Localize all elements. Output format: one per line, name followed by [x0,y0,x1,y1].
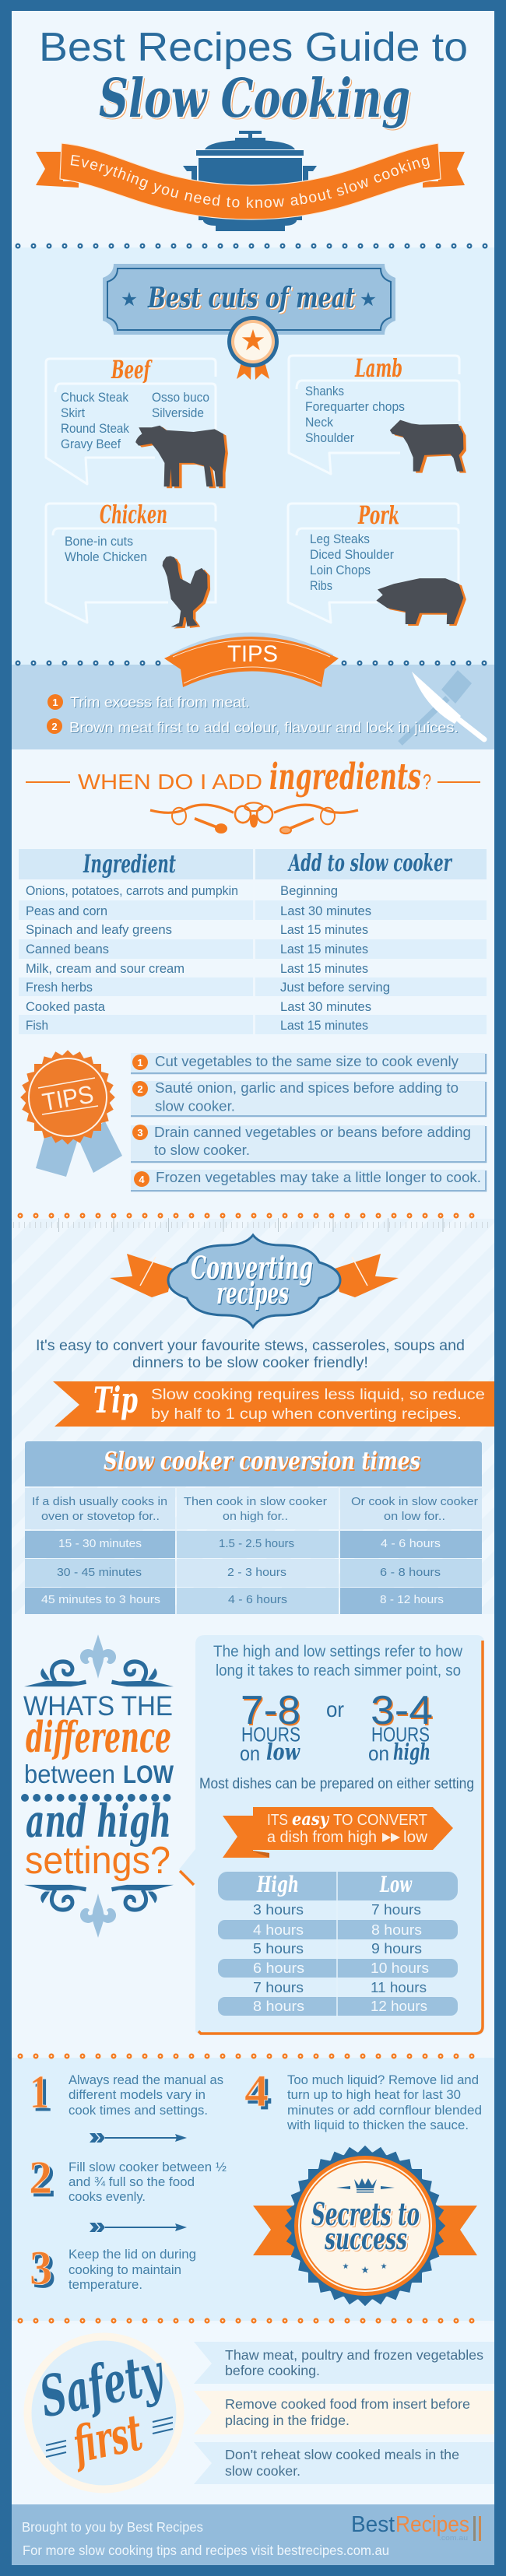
heading: chicken: Chicken [100,500,167,529]
stat: 7-8 hours on low: 7-8 [241,1688,300,1733]
ribbon text: Everything you need to know about slow cooking [70,154,430,208]
table rows: Beginning [280,884,338,898]
icon: pig [376,578,463,624]
hours rows [253,1902,429,2014]
conversion rows: 30 - 45 minutes [57,1567,142,1579]
table rows: Fish [26,1019,48,1033]
conversion rows [41,1538,444,1606]
hours rows: 11 hours [371,1980,427,1995]
intro text [36,1338,465,1371]
conversion rows: 1.5 - 2.5 hours [219,1538,294,1550]
panel: high and low settings [179,1635,484,2035]
banner: easy to convert: easy [292,1809,330,1830]
conversion rows: 15 - 30 minutes [58,1538,142,1550]
beef cuts list: Silverside [152,406,204,420]
intro text: It's easy to convert your favourite stews, casseroles, soups and [36,1338,465,1354]
lamb cuts list: Shoulder [305,431,354,445]
table header: Ingredient [83,849,176,879]
icon: slow cooker pot [183,131,317,231]
table rows: Canned beans [26,942,109,956]
safety band 1: before cooking. [225,2363,320,2378]
heading: lamb: Lamb [354,353,402,383]
lamb cuts list: Shanks [305,384,344,398]
logo: best recipes [351,2512,481,2542]
tip box 4 [131,1169,486,1191]
banner: tip: by half to 1 cup when converting recipes. [151,1406,462,1423]
hours rows: 8 hours [253,1999,304,2014]
secret 2: Fill slow cooker between ½ [69,2160,227,2174]
table rows: Onions, potatoes, carrots and pumpkin [26,884,238,898]
column headers: on high for.. [223,1511,288,1523]
stat: 7-8 hours on low: HOURS [241,1723,300,1746]
table rows: Peas and corn [26,904,107,918]
banner: tip: Tip [93,1379,138,1421]
icon: cow [135,426,225,486]
table header [83,849,452,879]
heading: when do i add ingredients: ? [423,770,431,794]
beef cuts list: Osso buco [152,391,209,405]
banner: tip: Slow cooking requires less liquid, so reduce [151,1387,485,1403]
secret 4: 4 [244,2065,269,2116]
footer [12,2504,494,2565]
hours rows: 4 hours [253,1922,304,1938]
table rows: Last 15 minutes [280,923,368,937]
heading: when do i add ingredients: ingredients [269,756,421,798]
heading text block: difference [26,1712,171,1762]
seal label: success [324,2221,407,2256]
seal label: Secrets to [311,2196,420,2233]
table rows: Last 30 minutes [280,1000,371,1014]
safety band 2: placing in the fridge. [225,2413,350,2428]
tip box 2: 2 [137,1083,143,1095]
icon: flourish with spoon and fork [150,802,358,834]
conversion rows: 8 - 12 hours [380,1594,444,1606]
table rows: Last 15 minutes [280,942,368,956]
secret 3: 3 [30,2242,52,2295]
ornament: bottom fleur and scrolls [24,1885,174,1938]
title line two: Slow Cooking: Slow Cooking [99,68,410,130]
safety band 1: Thaw meat, poultry and frozen vegetables [225,2347,483,2363]
safety band 3: Don't reheat slow cooked meals in the [225,2447,459,2462]
banner: easy to convert: low [403,1829,428,1846]
badge: converting recipes: Converting [191,1250,313,1286]
secret 3: Keep the lid on during [69,2248,196,2262]
footer credit: Brought to you by Best Recipes [22,2519,203,2535]
heading: what's the difference between low and high settings [23,1634,174,1938]
secret 4: with liquid to thicken the sauce. [286,2118,469,2132]
heading: pork: Pork [357,500,399,530]
secret 1: Always read the manual as [69,2073,223,2087]
badge: converting recipes [110,1235,399,1327]
secret 2: cooks evenly. [69,2190,146,2204]
beef cuts list: Chuck Steak [61,391,129,405]
table rows: Spinach and leafy greens [26,923,172,937]
pork cuts list [310,532,394,593]
secret 2: 2 [29,2152,52,2203]
secret 3: cooking to maintain [69,2263,181,2277]
column headers [32,1496,478,1523]
table rows: Milk, cream and sour cream [26,962,184,976]
seal label: TIPS [40,1080,96,1116]
stat: 3-4 hours on high: on [368,1742,389,1765]
tip 1: Trim excess fat from meat. [70,694,250,710]
column headers: on low for.. [384,1511,445,1523]
stat: 7-8 hours on low [240,1688,300,1765]
heading text block: LOW [123,1760,174,1788]
tip 2: 2 [51,721,58,732]
panel: best cuts of meat [46,264,463,627]
secret 2: and ¾ full so the food [69,2175,195,2189]
secret 3 [30,2242,196,2295]
heading text block: settings? [25,1840,170,1882]
footer credit: For more slow cooking tips and recipes visit bestrecipes.com.au [23,2543,389,2558]
secret 4 [244,2065,482,2132]
icon: sheep [390,420,463,472]
panel: safety first [23,2333,494,2494]
tip box 2: Sauté onion, garlic and spices before adding to [155,1079,459,1096]
tip box 4: Frozen vegetables may take a little longer to cook. [156,1169,481,1185]
speech bubble: pork [288,500,463,624]
badge: secrets to success seal [253,2146,477,2306]
pork cuts list: Ribs [310,579,332,593]
table rows: Fresh herbs [26,981,93,995]
hours rows: 10 hours [371,1960,429,1976]
heading text block: and high [26,1795,171,1848]
conversion rows: 2 - 3 hours [227,1567,286,1579]
lamb cuts list: Forequarter chops [305,400,405,414]
table rows: Cooked pasta [26,1000,106,1014]
badge: best cuts heading: Best cuts of meat [147,282,355,314]
table rows: Just before serving [280,981,390,995]
pork cuts list: Loin Chops [310,563,371,577]
chicken cuts list [65,535,147,564]
ornament: top fleur and scrolls [24,1634,174,1686]
settings intro text: long it takes to reach simmer point, so [216,1662,461,1679]
heading text block: WHATS THE [23,1691,173,1721]
stat: 3-4 hours on high: 3-4 [371,1688,433,1733]
table: when to add ingredients [19,849,487,1034]
column headers: If a dish usually cooks in [32,1496,167,1508]
column headers: Low [379,1872,413,1897]
secret 4: Too much liquid? Remove lid and [287,2073,479,2087]
safety band 3: slow cooker. [225,2463,300,2479]
secret 2 [29,2152,227,2204]
chicken cuts list: Bone-in cuts [65,535,133,549]
tip box 2 [131,1079,486,1116]
hours rows: 3 hours [253,1902,304,1918]
panel: converting recipes [25,1235,494,1614]
tip box 1 [131,1053,486,1073]
pork cuts list: Diced Shoulder [310,548,394,562]
beef cuts list: Round Steak [61,422,130,436]
table rows: Last 15 minutes [280,1019,368,1033]
safety band 2: Remove cooked food from insert before [225,2396,470,2412]
heading: beef: Beef [111,355,153,384]
column headers: High [256,1872,299,1897]
beef cuts list: Skirt [61,406,85,420]
conversion rows: 45 minutes to 3 hours [41,1594,160,1606]
title [39,25,468,130]
icon: arrow [90,2223,187,2232]
hours rows: 7 hours [253,1980,304,1995]
banner: subtitle ribbon [36,142,465,220]
hours rows: 7 hours [371,1902,421,1918]
hours rows: 12 hours [371,1999,427,2014]
secret 1: 1 [30,2066,49,2118]
stat: 7-8 hours on low: on [240,1742,260,1765]
icon: crown [336,2178,395,2193]
lamb cuts list [305,384,405,445]
speech bubble: lamb [289,353,463,474]
conversion rows: 4 - 6 hours [381,1538,441,1550]
speech bubble: beef [46,355,225,486]
tip box 4: 4 [139,1174,145,1185]
beef cuts list [61,391,209,451]
logo: best recipes: Recipes [395,2512,469,2537]
banner: easy to convert: TO CONVERT [333,1812,427,1829]
hours rows: 8 hours [371,1922,422,1938]
safety band 3 [194,2442,494,2484]
speech bubble: chicken [46,500,216,627]
banner: easy to convert: a dish from high [267,1829,377,1846]
heading text block: between [24,1760,115,1788]
settings intro text [213,1642,462,1679]
panel: vegetable tips list [131,1053,486,1191]
footer credit [22,2519,389,2558]
tip box 3: to slow cooker. [154,1142,250,1158]
heading: when do i add ingredients: WHEN DO I ADD [78,770,262,794]
heading text block [23,1691,174,1882]
secret 1: different models vary in [69,2088,206,2102]
note: most dishes: Most dishes can be prepared on either setting [199,1776,474,1792]
tip box 3: Drain canned vegetables or beans before adding [154,1124,471,1140]
tip box 1: 1 [137,1057,143,1069]
table: conversion times [25,1441,482,1614]
banner: easy to convert [223,1807,453,1858]
column headers: oven or stovetop for.. [41,1511,160,1523]
secret 4: turn up to high heat for last 30 [287,2088,461,2102]
logo: best recipes: Best [351,2512,395,2537]
hours rows: 6 hours [253,1960,304,1976]
safety band 2 [194,2391,494,2434]
intro text: dinners to be slow cooker friendly! [132,1355,368,1371]
icon: crossed cleaver and knife [400,670,484,743]
table rows: Last 15 minutes [280,962,368,976]
icon: arrow [90,2133,187,2143]
icon: rooster [163,556,208,627]
badge: safety first circle: first [66,2403,147,2475]
tip box 1: Cut vegetables to the same size to cook evenly [155,1053,459,1069]
table: high to low conversion [218,1872,458,2017]
badge: tips seal [20,1050,122,1177]
safety band 1 [194,2342,494,2384]
badge: best cuts heading [103,264,395,335]
tip 2: Brown meat first to add colour, flavour and lock in juices. [69,719,459,735]
text: or: or [326,1697,344,1721]
panel: meat tips [47,632,484,743]
conversion rows: 4 - 6 hours [228,1594,287,1606]
banner: easy to convert: ITS [267,1812,288,1829]
banner: tip [53,1379,494,1427]
chicken cuts list: Whole Chicken [65,550,147,564]
stat: 3-4 hours on high: high [393,1739,430,1765]
column headers [256,1872,413,1897]
tip box 2: slow cooker. [155,1097,235,1114]
stat: 7-8 hours on low: low [266,1739,300,1765]
banner: tips arch [164,632,339,687]
panel: secrets to success [29,2065,482,2306]
secret 1 [30,2066,223,2118]
seal label [311,2196,420,2256]
secret 4: minutes or add cornflour blended [287,2104,482,2118]
table rows: Last 30 minutes [280,904,371,918]
pork cuts list: Leg Steaks [310,532,370,546]
hours rows: 9 hours [371,1941,422,1957]
stat: 3-4 hours on high: HOURS [371,1723,430,1746]
icon: rosette with star [227,316,279,380]
badge: safety first circle [23,2333,184,2494]
heading: when do i add ingredients [26,756,480,798]
tip box 3: 3 [137,1127,143,1139]
hours rows: 5 hours [253,1941,304,1957]
badge: safety first circle: Safety [34,2339,170,2430]
title line one: Best Recipes Guide to [39,25,468,70]
lamb cuts list: Neck [305,416,334,430]
logo: best recipes: .com.au [439,2534,468,2542]
banner label: TIPS [227,641,278,667]
tip box 3 [131,1124,486,1162]
table rows [26,884,390,1033]
stat: 3-4 hours on high [368,1688,433,1765]
secret 1: cook times and settings. [69,2104,208,2118]
column headers: Or cook in slow cooker [351,1496,478,1508]
badge: converting recipes: recipes [216,1276,289,1311]
conversion rows: 6 - 8 hours [380,1567,441,1579]
secret 3: temperature. [69,2278,142,2292]
settings intro text: The high and low settings refer to how [213,1642,462,1661]
beef cuts list: Gravy Beef [61,437,121,451]
icon: three stars [343,2263,387,2273]
tip 1: 1 [52,697,58,708]
column headers: Then cook in slow cooker [184,1496,327,1508]
